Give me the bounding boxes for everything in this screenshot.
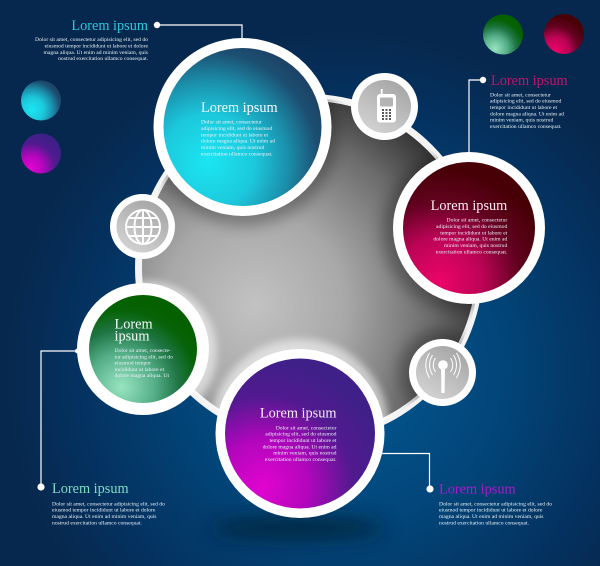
- purple circle text: Dolor sit amet, consectetur: [276, 425, 337, 431]
- callout heading: Lorem ipsum: [52, 481, 129, 497]
- callout text: tempor incididunt ut labore et: [490, 105, 557, 111]
- purple circle text: tempor incididunt ut labore et: [269, 438, 337, 444]
- callout text: Dolor sit amet, consectetur adipisicing elit, sed do: [35, 37, 148, 43]
- ball: green: [483, 14, 523, 54]
- crimson circle text: exercitation ullamco consequat.: [436, 249, 508, 255]
- callout heading: Lorem ipsum: [439, 481, 516, 497]
- callout: crimson: [490, 73, 568, 130]
- cyan circle text: Dolor sit amet, consectetur: [201, 120, 262, 126]
- crimson circle text: [433, 218, 508, 255]
- cyan circle text: exercitation ullamco consequat.: [201, 151, 273, 157]
- callout text: dolore magna aliqua. Ut enim ad: [490, 111, 564, 117]
- crimson circle text: Dolor sit amet, consectetur: [447, 218, 507, 224]
- cyan circle text: minim veniam, quis nostrud: [201, 145, 264, 151]
- cyan circle text: adipisicing elit, sed do eiusmod: [201, 126, 272, 132]
- callout text: exercitation ullamco consequat.: [490, 124, 562, 130]
- purple circle text: [263, 425, 337, 463]
- callout text: nostrud exercitation ullamco consequat.: [439, 520, 529, 526]
- green circle text: incididunt ut labore et: [114, 367, 165, 373]
- ground shadow: [210, 518, 386, 538]
- cyan circle text: [201, 120, 275, 157]
- circle: crimson: [393, 152, 545, 304]
- callout: green: [52, 481, 165, 526]
- cyan circle text: dolore magna aliqua. Ut enim ad: [201, 139, 275, 145]
- callout text: eiusmod tempor incididunt ut labore et dolore: [52, 508, 156, 514]
- callout text: nostrud exercitation ullamco consequat.: [58, 56, 149, 62]
- callout text: magna aliqua. Ut enim ad minim veniam, quis: [52, 514, 156, 520]
- crimson circle text: dolore magna aliqua. Ut enim ad: [433, 237, 507, 243]
- green circle heading: ipsum: [114, 328, 149, 344]
- panel: central grey disc: [135, 94, 480, 425]
- callout text: Dolor sit amet, consectetur adipisicing elit, sed do: [52, 501, 165, 507]
- connector: green callout: [41, 351, 78, 487]
- connector dots: [37, 22, 486, 493]
- callout text: magna aliqua. Ut enim ad minim veniam, quis: [44, 50, 148, 56]
- connector: cyan callout: [157, 25, 242, 42]
- circle: cyan: [154, 38, 332, 216]
- callout text: nostrud exercitation ullamco consequat.: [52, 520, 142, 526]
- callout text: eiusmod tempor incididunt ut labore et dolore: [439, 508, 543, 514]
- purple circle text: adipisicing elit, sed do eiusmod: [265, 432, 337, 438]
- icon: globe: [110, 194, 175, 259]
- callout text: minim veniam, quis nostrud: [490, 118, 553, 124]
- ball: magenta: [21, 134, 61, 174]
- green circle text: tur adipisicing elit, sed do: [114, 354, 173, 360]
- purple circle text: minim veniam, quis nostrud: [273, 451, 337, 457]
- callout: cyan: [35, 18, 149, 62]
- purple circle text: dolore magna aliqua. Ut enim ad: [263, 444, 337, 450]
- connector: purple callout: [382, 454, 430, 489]
- crimson circle text: adipisicing elit, sed do eiusmod: [436, 224, 507, 230]
- callout heading: Lorem ipsum: [71, 18, 148, 34]
- callout text: Dolor sit amet, consectetur: [490, 92, 551, 98]
- icon: mobile phone: [351, 73, 418, 140]
- callout text: eiusmod tempor incididunt ut labore et dolore: [45, 43, 148, 49]
- crimson circle text: minim veniam, quis nostrud: [444, 243, 507, 249]
- connector: crimson callout: [469, 80, 483, 155]
- callout text: magna aliqua. Ut enim ad minim veniam, quis: [439, 514, 544, 520]
- callout text: adipisicing elit, sed do eiusmod: [490, 99, 561, 105]
- circle: green: [77, 283, 209, 415]
- cyan circle text: tempor incididunt ut labore et: [201, 132, 268, 138]
- purple circle text: exercitation ullamco consequat.: [265, 457, 337, 463]
- crimson circle text: tempor incididunt ut labore et: [440, 230, 508, 236]
- callout text: [52, 501, 165, 526]
- cyan circle heading: Lorem ipsum: [201, 100, 278, 116]
- callout: purple: [439, 481, 552, 526]
- green circle heading: Lorem: [114, 316, 153, 332]
- ball: cyan: [21, 80, 61, 120]
- circle: purple: [216, 349, 384, 518]
- callout text: [439, 501, 552, 526]
- callout heading: Lorem ipsum: [491, 73, 568, 89]
- green circle text: eiusmod tempor: [114, 361, 151, 367]
- purple circle heading: Lorem ipsum: [260, 406, 336, 422]
- green circle text: [114, 348, 173, 379]
- callout text: [35, 37, 149, 62]
- icon: wireless antenna: [409, 339, 476, 406]
- green circle text: dolore magna aliqua. Ut: [114, 373, 169, 379]
- callout text: [490, 92, 564, 130]
- callout text: Dolor sit amet, consectetur adipisicing elit, sed do: [439, 501, 552, 507]
- ball: crimson: [544, 14, 584, 54]
- crimson circle heading: Lorem ipsum: [431, 198, 507, 214]
- green circle text: Dolor sit amet, consecte-: [114, 348, 171, 354]
